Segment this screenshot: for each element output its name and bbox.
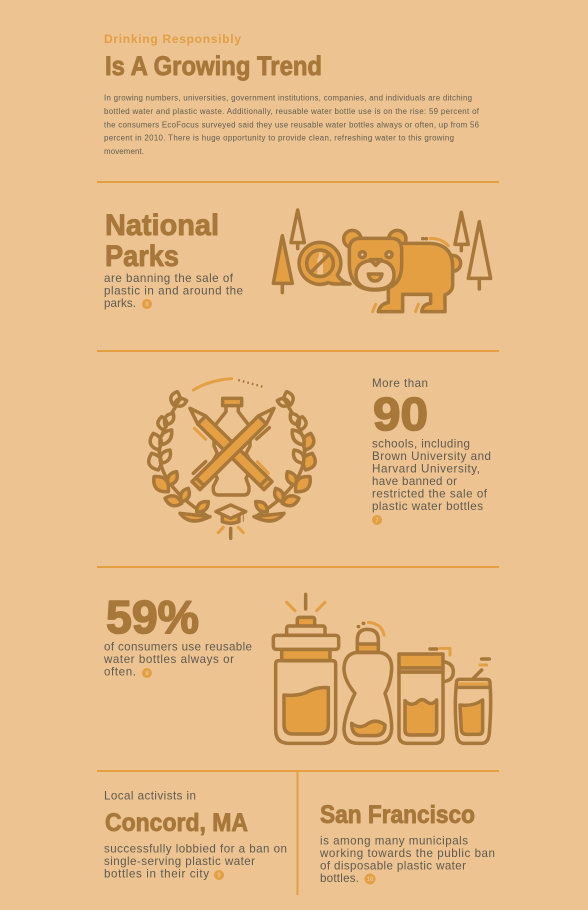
san francisco description: of disposable plastic water	[320, 860, 466, 872]
crossed pencils	[190, 408, 274, 490]
schools description: Brown University and	[372, 450, 491, 463]
consumers description: often.	[104, 666, 136, 678]
big number 59%: 59%	[106, 591, 199, 643]
intro paragraph: the consumers EcoFocus surveyed said they use reusable water bottles always or often, up from 56	[104, 120, 480, 130]
panel: 59 percent text	[103, 591, 252, 678]
more than label: More than	[372, 377, 428, 390]
schools description: have banned or	[372, 475, 457, 488]
handled jar	[399, 648, 453, 743]
footnote badge 10: 10	[367, 877, 374, 883]
heading: national parks	[105, 209, 219, 273]
schools description: Harvard University,	[372, 462, 480, 476]
panel: national parks text	[104, 209, 243, 310]
panel: san francisco	[319, 801, 495, 885]
concord description: successfully lobbied for a ban on	[104, 842, 287, 856]
icon: bear with no-plastic speech bubble and trees	[273, 210, 491, 312]
squeeze bottle	[344, 622, 392, 743]
consumers description	[103, 640, 252, 678]
national parks description	[104, 272, 243, 310]
footnote badge 8: 8	[145, 671, 149, 677]
heading: san francisco: San Francisco	[320, 801, 475, 829]
graduation cap	[216, 505, 246, 538]
san francisco description: is among many municipals	[320, 834, 468, 848]
panel: 90 schools text	[372, 377, 491, 525]
footnote badge 9	[214, 870, 224, 880]
consumers description: water bottles always or	[103, 653, 234, 666]
panel: concord	[104, 790, 287, 880]
footnote badge 9: 9	[217, 873, 221, 879]
schools description: schools, including	[372, 438, 470, 450]
concord description	[104, 842, 287, 880]
consumers description: of consumers use reusable	[104, 640, 252, 654]
san francisco description: working towards the public ban	[319, 847, 495, 860]
big number 90: 90	[373, 388, 428, 440]
footnote badge 8	[142, 668, 152, 678]
intro paragraph: percent in 2010. There is huge opportunity to provide clean, refreshing water to this growing	[104, 134, 454, 142]
bottle	[213, 398, 251, 495]
large jar	[273, 594, 339, 743]
schools description: plastic water bottles	[372, 500, 483, 513]
schools description	[372, 438, 491, 513]
eyebrow heading: Drinking Responsibly	[104, 32, 241, 46]
straw cup	[455, 659, 491, 743]
footnote badge 10	[364, 874, 376, 884]
intro paragraph	[104, 94, 480, 156]
schools description: restricted the sale of	[372, 488, 488, 500]
heading: national parks: Parks	[105, 240, 179, 273]
footnote badge 7	[372, 515, 382, 525]
heading: concord: Concord, MA	[105, 809, 248, 837]
local activists label: Local activists in	[104, 790, 196, 802]
national parks description: are banning the sale of	[104, 272, 234, 285]
san francisco description	[319, 834, 495, 885]
footnote badge 7: 7	[375, 518, 379, 524]
intro paragraph: movement.	[104, 147, 144, 156]
concord description: single-serving plastic water	[104, 855, 255, 868]
footnote badge 6: 6	[145, 302, 149, 308]
intro paragraph: bottled water and plastic waste. Additionally, reusable water bottle use is on the rise: 59 percent of	[104, 107, 480, 116]
icon: four reusable water bottles	[273, 594, 491, 743]
san francisco description: bottles.	[320, 872, 359, 885]
icon: crossed pencils over bottle in laurel wreath	[149, 379, 315, 538]
title: Is A Growing Trend	[105, 51, 322, 81]
concord description: bottles in their city	[104, 868, 209, 880]
intro paragraph: In growing numbers, universities, government institutions, companies, and individuals are ditching	[104, 94, 472, 102]
laurel branch right	[254, 392, 315, 521]
national parks description: plastic in and around the	[104, 284, 243, 298]
national parks description: parks.	[104, 297, 136, 310]
heading: national parks: National	[105, 209, 219, 242]
laurel branch left	[149, 392, 210, 521]
